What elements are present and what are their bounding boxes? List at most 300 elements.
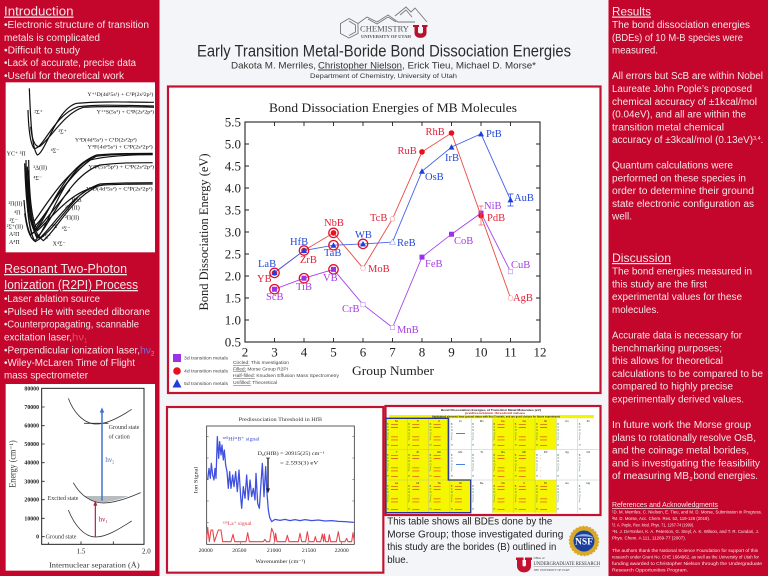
x axis labels: 11 [504, 344, 517, 360]
table element headers: Pt [544, 481, 547, 485]
table ligand letters: FFFFFFFFFF [387, 470, 581, 472]
table heading [441, 408, 541, 415]
authors: Christopher Nielson [318, 60, 402, 72]
caption: table description: This table shows all BDEs done by the [387, 516, 552, 528]
caption: table description: blue. [387, 554, 408, 566]
table ligand letters: BBBBBBBBBB [387, 423, 581, 426]
text block: R2PI bullets: •Wiley-McLaren Time of Flight [4, 358, 135, 369]
table element headers: Cd [586, 450, 590, 454]
chart: R2PI energy level diagram [6, 384, 155, 571]
table element headers: Cr [459, 419, 462, 423]
logo: chemistry University of Utah: CHEMISTRY [360, 24, 409, 34]
chart: YC potential energy curves: ⁴Σ⁻ [62, 227, 70, 233]
red La signal [207, 527, 354, 542]
data labels: 5d: LaB [258, 259, 276, 270]
table element headers: Hg [586, 481, 590, 485]
caption: table description [387, 516, 563, 566]
threshold value: = 2.593(3) eV [280, 459, 319, 466]
text block: introduction bullets [4, 20, 149, 82]
table heading: Bond Dissociation Energies of Transition Metal Molecules (eV) [441, 408, 541, 412]
table element headers: Nb [437, 450, 441, 454]
text block: results [611, 20, 763, 222]
caption: table description: this study are the borides (B) outlined in [387, 541, 556, 553]
table ligand letters: HHHHHHHHHH [387, 475, 581, 478]
text block: acknowledgments: funding awarded to Christopher Nielson through the Undergraduate [612, 561, 762, 566]
table element headers: V [438, 419, 440, 423]
text block: discussion: Accurate data is necessary for [612, 330, 743, 342]
chart: YC potential energy curves: YC⁺ ³Π [7, 151, 26, 158]
y axis labels: 3.5 [225, 202, 241, 218]
panel: HfB predissociation spectrum: ¹³⁹La⁺ signal [222, 520, 252, 527]
table ligand letters: HHHHHHHHHH [387, 508, 581, 511]
x axis labels: 9 [448, 344, 455, 360]
text block: results: . [760, 135, 763, 146]
signal labels: ¹⁸⁰Hf¹¹B⁺ signal [222, 436, 260, 443]
table ligand letters [387, 423, 581, 511]
chart: R2PI energy level diagram: 1.5 [77, 547, 86, 555]
logo: Office of Undergraduate Research: UNDERGRADUATE RESEARCH [534, 561, 600, 567]
text block: discussion: compared to highly precise [612, 382, 733, 392]
icon: NSF logo [570, 526, 598, 556]
potential wells [83, 496, 128, 503]
data labels: 5d: AuB [514, 193, 534, 204]
legend: metal series: 4d transition metals [184, 368, 228, 374]
text block: R2PI bullets: excitation laser, [4, 332, 72, 344]
axis tick labels: 70000 [24, 405, 39, 411]
y axis labels: 4.5 [225, 158, 241, 174]
chart: YC potential energy curves: ⁴Σ [52, 224, 58, 230]
chart: R2PI energy level diagram: Ground state [109, 425, 140, 431]
spectrum title: Predissociation Threshold in HfB [239, 416, 322, 423]
text block: R2PI bullets [4, 294, 155, 382]
text block: discussion: benchmarking purposes; [612, 344, 722, 354]
text block: results: 3,4 [753, 136, 761, 142]
x axis labels: 7 [389, 344, 396, 360]
table ligand letters: NNNNNNNNNN [387, 491, 581, 494]
heading: Discussion: Discussion [612, 251, 671, 265]
heading: Introduction: Introduction [4, 4, 74, 18]
chart: R2PI energy level diagram: Ground state [46, 534, 77, 540]
chart: YC potential energy curves: ⁴Σ⁻ [51, 149, 59, 155]
axis tick labels: 20000 [24, 498, 39, 504]
data labels: 4d: YB [257, 274, 272, 285]
series: 4d transition metals [272, 130, 513, 300]
text block: R2PI bullets: 2 [151, 352, 155, 358]
text block: results: All errors but ScB are within Nobel [612, 71, 763, 82]
text block: introduction bullets: •Useful for theoretical work [4, 71, 125, 82]
table element headers: Ag [565, 450, 569, 454]
data labels: 3d: CuB [511, 260, 530, 271]
text block: results: (0.04eV), and all are within the [612, 110, 746, 120]
table element headers: Cu [565, 419, 569, 423]
table element headers: Zr [416, 450, 419, 454]
table highlight bar [389, 414, 594, 418]
legend: metal series: 5d transition metals [184, 381, 228, 386]
chart: YC potential energy curves: Y²D(4d¹5s²) + C³P(2s²2p²) [86, 187, 153, 193]
table grid [386, 418, 599, 513]
table element headers: La [395, 481, 398, 485]
chart: R2PI energy level diagram: Excited state [48, 496, 79, 502]
chart: R2PI energy level diagram: 2.0 [142, 547, 151, 555]
y axis title: Bond Dissociation Energy (eV) [196, 154, 211, 310]
table ligand letters: BBBBBBBBBB [387, 485, 581, 488]
legend: marker fill meaning: Circled: This Investigation [233, 360, 290, 365]
table element headers: Mn [480, 419, 484, 423]
text block: references: ⁴N. J. DeYonker, K. A. Peterson, G. Steyl, A. K. Wilson, and T. R. Cundari, J. [612, 529, 759, 534]
table element headers: Ta [438, 481, 441, 485]
chart title: Bond Dissociation Energies of MB Molecules [269, 101, 517, 115]
logo: chemistry University of Utah: UNIVERSITY OF UTAH [361, 34, 412, 39]
data labels: 3d: ScB [266, 292, 284, 303]
text block: discussion: 2 [690, 477, 693, 483]
chart: YC potential energy curves: ²Σ⁺ [58, 128, 67, 135]
text block: discussion: experimental values for these [612, 292, 742, 303]
table element headers [395, 419, 590, 485]
panel: HfB predissociation spectrum: Wavenumber (cm⁻¹) [255, 558, 305, 565]
text block: R2PI bullets: •Perpendicular ionization laser, [4, 346, 140, 356]
chart: R2PI energy level diagram: of cation [109, 433, 130, 440]
spectrum axis labels: 20500 [232, 548, 247, 554]
table ligand letters: NNNNNNNNNN [387, 460, 581, 463]
panel: HfB predissociation spectrum [167, 407, 383, 573]
data labels: 4d: PdB [487, 213, 505, 224]
data labels: 4d: MoB [368, 264, 390, 275]
logo: chemistry University of Utah [340, 7, 428, 39]
caption: table description: Morse Group; those investigated during [387, 528, 563, 540]
data labels: 3d: VB [323, 273, 338, 284]
table ligand letters: FFFFFFFFFF [387, 500, 581, 504]
text block: discussion: and the coinage metal borides, [612, 446, 749, 456]
table ligand letters: OOOOOOOOOO [387, 432, 581, 435]
table highlight bar: Highlighted elements have ground states with first 2 metals, and are good choices for future experiments [432, 414, 561, 418]
text block: references: ³J. A. Pople, Rev. Mod. Phys. 71, 1267-74 (1999). [612, 522, 694, 528]
x axis labels: 4 [301, 344, 308, 360]
data labels: 3d: TiB [296, 282, 312, 293]
heading: Resonant Two-Photon Ionization [4, 261, 138, 292]
y axis labels: 5.5 [225, 114, 241, 130]
legend: metal series [172, 354, 228, 388]
text block: introduction bullets: metals is complicated [4, 33, 100, 44]
data labels: 4d: NbB [324, 218, 344, 229]
text block: results: state electronic configuration as [612, 199, 754, 210]
chart: YC potential energy curves: ²Σ⁻ [9, 219, 18, 225]
table theoretical marks [456, 434, 465, 464]
chart: YC potential energy curves: ⁴Σ⁻ [33, 176, 42, 182]
data labels: 5d [258, 129, 534, 270]
text block: discussion: this study are the first [612, 280, 707, 290]
y axis labels: 1.5 [225, 290, 241, 306]
arrow: hv2 [100, 407, 104, 501]
blue HfB signal [208, 437, 354, 522]
data labels: 5d: TaB [324, 248, 341, 259]
text block: discussion: this allows for theoretical [612, 356, 723, 367]
spectrum frame [207, 426, 354, 544]
axis tick labels [24, 386, 39, 541]
text block: acknowledgments [612, 548, 762, 572]
chart: YC potential energy curves: ²Σ⁺ [34, 109, 43, 116]
data labels: 4d: AgB [513, 293, 533, 304]
table element headers: Hf [416, 481, 419, 485]
legend: marker fill meaning: Filled: Morse Group R2PI [233, 366, 288, 372]
chart: YC potential energy curves: ²Δ(II) [33, 164, 47, 171]
axis tick labels: 50000 [24, 442, 39, 448]
table element headers: Zn [587, 419, 590, 423]
panel: left column introduction and R2PI [0, 0, 160, 576]
icon: red block U small [516, 558, 532, 572]
data labels: 5d: IrB [445, 153, 459, 164]
chart: YC potential energy curves: ²Σ⁻ [43, 235, 51, 241]
spectrum axis labels: 21000 [267, 548, 281, 554]
panel: table of Morse Group BDEs [386, 406, 600, 515]
table element headers: Rh [523, 450, 527, 454]
x axis labels: 3 [271, 344, 278, 360]
text block: R2PI bullets: •Pulsed He with seeded diborane [4, 307, 150, 318]
table element headers: Au [565, 481, 569, 485]
spectrum axis labels [199, 548, 349, 554]
legend: marker fill meaning: Unfilled: Theoretical [233, 380, 277, 385]
text block: results: accuracy of ±3kcal/mol (0.13eV) [612, 135, 753, 146]
chart: R2PI energy level diagram: Energy (cm⁻¹) [7, 440, 17, 488]
chart: YC potential energy curves: A⁴Π [9, 240, 20, 246]
table element headers: Mo [458, 450, 463, 454]
text block: discussion: of measuring MB [612, 471, 689, 482]
text block: references: ¹D. M. Merriles, C. Nielson, E. Tieu, and M. D. Morse, Submission in Progress. [612, 510, 762, 514]
data labels: 3d: NiB [484, 201, 502, 212]
text block: discussion: experimentally derived values. [612, 394, 744, 406]
y axis labels: 5.0 [225, 136, 241, 152]
threshold value [258, 450, 325, 466]
axis tick labels: 30000 [24, 479, 39, 485]
text block: discussion: and is investigating the feasibility [612, 458, 760, 470]
table element headers: Fe [501, 419, 505, 423]
panel: main bond dissociation energy chart [168, 86, 600, 393]
table ligand letters: SSSSSSSSSS [387, 497, 581, 500]
text block: R2PI bullets: mass spectrometer [4, 370, 89, 382]
department: Department of Chemistry, University of Utah [310, 73, 457, 80]
table element headers: Os [501, 481, 505, 485]
data labels: 5d: ReB [397, 238, 416, 249]
spectrum axis labels: 20000 [199, 548, 213, 554]
table ligand letters: CCCCCCCCCC [387, 426, 581, 429]
panel: HfB predissociation spectrum: Ion Signal [194, 466, 200, 493]
arrow: hv1 [93, 501, 97, 537]
chart: YC potential energy curves: ²Π(II) [8, 200, 22, 207]
text block: discussion: molecules. [612, 305, 659, 316]
chart: YC potential energy curves: ²Π(II) [65, 214, 79, 221]
heading: references and acknowledgments: References and Acknowledgments [612, 502, 718, 509]
y axis labels: 2.0 [225, 268, 241, 284]
x axis labels: 6 [360, 344, 367, 360]
panel: header with logo and title [197, 7, 571, 80]
text block: R2PI bullets: hν [72, 332, 84, 344]
data labels: 3d: CrB [342, 304, 360, 315]
chart: YC potential energy curves: X⁴Σ⁻ [53, 242, 66, 248]
table element headers: Ti [417, 419, 419, 423]
chart: YC potential energy curves: A²Π [9, 232, 20, 238]
text block: introduction bullets: •Electronic structure of transition [4, 20, 149, 31]
table element headers: Ru [501, 450, 505, 454]
data labels: 4d: RhB [426, 127, 445, 138]
authors [231, 60, 536, 72]
text block: discussion: calculations to be compared to be [612, 369, 763, 380]
spectrum axis labels: 21500 [302, 548, 316, 554]
data labels: 4d: ZrB [300, 255, 317, 266]
axis tick labels: 80000 [24, 386, 39, 392]
y axis labels [225, 114, 241, 350]
table heading: predissociation threshold values [465, 411, 526, 415]
text block: results: well. [611, 212, 632, 222]
table ligand letters: CCCCCCCCCC [387, 457, 581, 460]
logo: Office of Undergraduate Research [516, 556, 600, 572]
y axis labels: 1.0 [225, 312, 241, 328]
title: Early Transition Metal-Boride Bond Dissociation Energies [197, 42, 571, 60]
plot frame and ticks [245, 122, 540, 342]
table element headers: Sc [395, 419, 399, 423]
text block: results: chemical accuracy of ±1kcal/mol [612, 97, 757, 108]
text block: results: transition metal chemical [612, 122, 724, 134]
data labels: 4d: RuB [398, 146, 417, 157]
heading: Results: Results [612, 4, 651, 18]
x axis labels: 12 [534, 344, 546, 360]
legend: metal series: 3d transition metals [184, 356, 228, 360]
x axis labels: 2 [242, 344, 248, 360]
text block: results: order to determine their ground [612, 186, 754, 197]
data labels: 5d: PtB [486, 129, 502, 140]
chart: YC potential energy curves: B⁴Δ [72, 197, 82, 203]
text block: discussion: In future work the Morse group [612, 420, 751, 431]
red circles: this investigation [270, 228, 368, 294]
data labels: 3d: CoB [454, 236, 473, 247]
chart: YC potential energy curves: Y⁺¹S(5s²) + C³P(2s²2p²) [97, 109, 154, 115]
panel: right column results and discussion [608, 0, 768, 576]
table ligand letters: FFFFFFFFFF [387, 438, 581, 442]
data labels: 4d: TcB [370, 213, 387, 224]
text block: discussion: The bond energies measured in [612, 266, 752, 278]
text block: results: Laureate John Pople’s proposed [612, 84, 752, 95]
text block: acknowledgments: Research Opportunities Program. [612, 568, 688, 572]
legend: marker fill meaning: Half-filled: Knudsen Effusion Mass Spectrometry [233, 373, 340, 378]
table ligand letters: HHHHHHHHHH [387, 444, 581, 447]
x axis labels: 5 [330, 344, 337, 360]
table ligand letters: BBBBBBBBBB [387, 454, 581, 457]
blue outline around borides [386, 418, 471, 513]
chart: YC potential energy curves: ⁴Π [14, 211, 21, 217]
series: 3d transition metals [272, 211, 513, 330]
text block: references: ²M. D. Morse, Acc. Chem. Res. 52, 119-126 (2019). [612, 516, 710, 521]
axis tick labels: 60000 [24, 424, 39, 430]
text block: discussion: plans to rotationally resolve OsB, [612, 433, 756, 444]
chart: YC potential energy curves [6, 82, 155, 252]
table ligand letters: OOOOOOOOOO [387, 494, 581, 497]
data labels: 5d: HfB [290, 237, 308, 248]
chart: YC potential energy curves: Y⁴F(4d²5s¹) + C³P(2s²2p²) [87, 144, 153, 150]
table ligand letters: NNNNNNNNNN [387, 429, 581, 432]
y axis labels: 0.5 [225, 334, 241, 350]
logo: Office of Undergraduate Research: THE UNIVERSITY OF UTAH [534, 568, 570, 572]
heading: Resonant Two-Photon Ionization: Ionization (R2PI) Process [4, 277, 138, 292]
table yellow cells [386, 418, 556, 513]
threshold value: D₀(HfB) = 20915(25) cm⁻¹ [258, 450, 325, 457]
axis tick labels: 10000 [24, 516, 39, 522]
series: 5d transition metals [272, 131, 514, 275]
authors: , Erick Tieu, Michael D. Morse* [402, 60, 536, 72]
table ligand letters: SSSSSSSSSS [387, 435, 581, 438]
table element headers: W [459, 481, 462, 485]
chart: R2PI energy level diagram: hν₂ [105, 456, 115, 464]
icon: red block U [413, 25, 428, 38]
chart: YC potential energy curves: ²Σ⁺(II) [7, 224, 23, 231]
axis tick labels: 40000 [24, 461, 39, 467]
x axis labels [242, 344, 546, 360]
authors: Dakota M. Merriles, [231, 60, 316, 72]
data labels: 3d [266, 201, 530, 336]
x axis labels: 10 [474, 344, 488, 360]
text block: R2PI bullets: 1 [84, 338, 88, 344]
text block: results: Quantum calculations were [612, 160, 733, 172]
data labels: 5d: OsB [425, 172, 444, 183]
table element headers: Co [523, 419, 527, 423]
legend: marker fill meaning [233, 360, 340, 385]
chart: YC potential energy curves: Y⁺¹D(4d¹5s¹) + C³P(2s²2p²) [87, 92, 154, 98]
threshold arrow [266, 458, 270, 493]
icon: NSF logo: NSF [575, 538, 593, 548]
table element headers: Re [480, 481, 484, 485]
text block: results: measured. [612, 46, 658, 56]
table element headers: Ir [523, 481, 525, 485]
logo: Office of Undergraduate Research: Office of [534, 556, 545, 560]
heading: Resonant Two-Photon Ionization: Resonant Two-Photon [4, 261, 127, 276]
data labels: 3d: FeB [425, 259, 443, 270]
x axis labels: 8 [419, 344, 425, 360]
text block: R2PI bullets: •Counterpropagating, scannable [4, 320, 139, 330]
text block: acknowledgments: The authors thank the National Science Foundation for support of this [612, 548, 759, 553]
table value marks [391, 424, 562, 509]
chart: YC potential energy curves: Y²P(5s²5p¹) + C³P(2s²2p²) [88, 164, 154, 170]
table ligand letters: CCCCCCCCCC [387, 488, 581, 491]
text block: discussion [612, 266, 763, 483]
table ligand letters: OOOOOOOOOO [387, 463, 581, 466]
y axis labels: 4.0 [225, 180, 241, 196]
text block: introduction bullets: •Difficult to study [4, 46, 80, 56]
chart: YC potential energy curves: Y²D(4d¹5s²) + C¹D(2s²2p²) [75, 138, 137, 144]
text block: introduction bullets: •Lack of accurate, precise data [4, 58, 136, 69]
text block: acknowledgments: research under Grant No. CHE 1664962, as well as the University of Utah for [612, 554, 759, 560]
data labels: 3d: MnB [397, 325, 419, 336]
spectrum axis labels: 22000 [335, 548, 349, 554]
chart: R2PI energy level diagram: hν₁ [99, 516, 108, 524]
table ligand letters: SSSSSSSSSS [387, 466, 581, 469]
text block: results: (BDEs) of 10 M-B species were [612, 33, 743, 44]
table element headers: Pd [544, 450, 548, 454]
y axis labels: 2.5 [225, 246, 241, 262]
table element headers: Y [396, 450, 398, 454]
text block: R2PI bullets: hν [140, 346, 151, 356]
axis tick labels: 0 [36, 535, 39, 541]
data labels: 5d: WB [355, 230, 372, 241]
table element headers: Tc [480, 450, 484, 454]
table element headers: Ni [544, 419, 547, 423]
text block: R2PI bullets: •Laser ablation source [4, 294, 100, 305]
text block: references [612, 510, 762, 540]
x axis title: Group Number [352, 363, 435, 378]
text block: results: performed on these species in [612, 174, 746, 184]
chart: YC potential energy curves: ²Σ (II) [65, 204, 80, 211]
text block: results: The bond dissociation energies [612, 20, 750, 31]
data labels: 4d [257, 127, 533, 304]
y axis labels: 3.0 [225, 224, 241, 240]
text block: discussion: bond energies. [694, 471, 758, 482]
text block: references: Phys. Chem. A 111, 11269-77 (2007). [612, 536, 686, 540]
